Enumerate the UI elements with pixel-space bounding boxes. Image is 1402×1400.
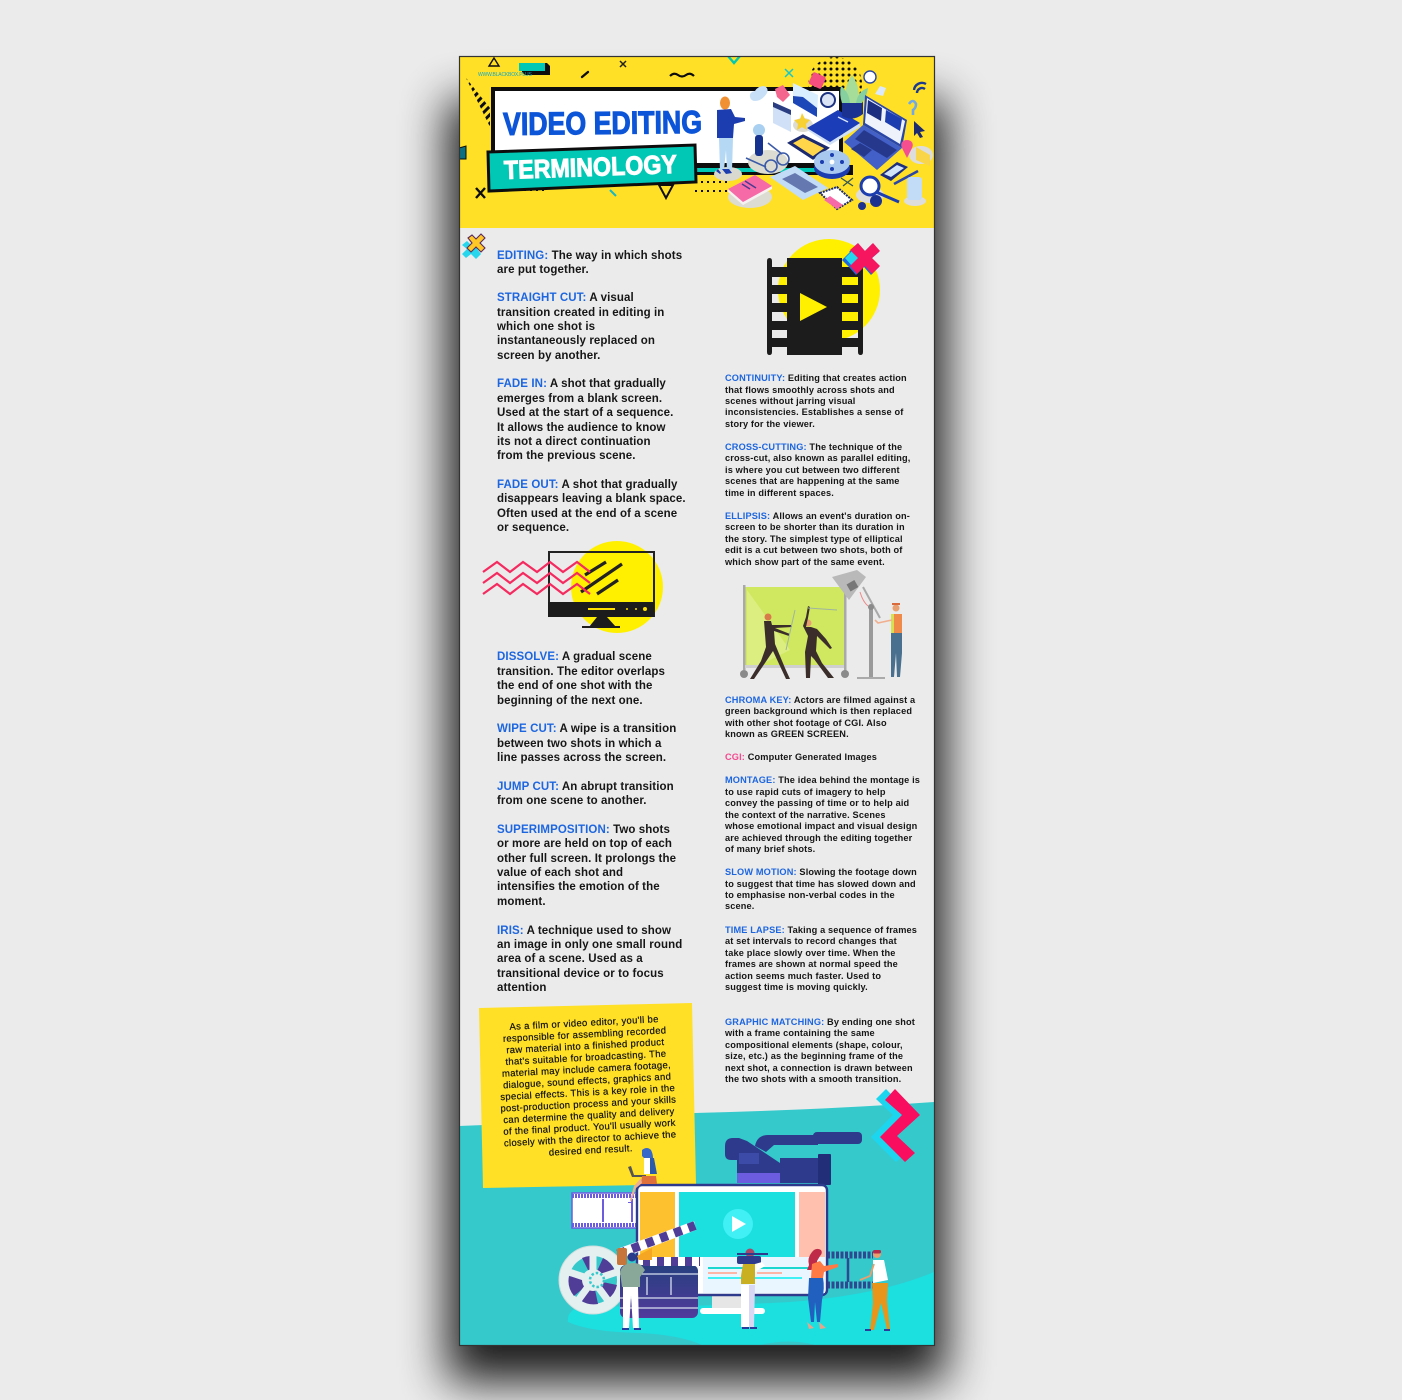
term: cross-cutting: scenes that are happening at the same	[725, 476, 900, 486]
text column: right top	[724, 373, 911, 567]
term: cross-cutting: cross-cut, also known as parallel editing,	[725, 453, 911, 463]
icon: newspaper	[770, 166, 828, 200]
term: chroma key: known as GREEN SCREEN.	[725, 729, 849, 739]
icon: chip	[820, 187, 852, 209]
icon: monitor with zigzag	[483, 541, 663, 633]
term: graphic matching: GRAPHIC MATCHING: By ending one shot	[725, 1017, 915, 1027]
term: chroma key: CHROMA KEY: Actors are filmed against a	[725, 695, 915, 705]
term: montage: MONTAGE: The idea behind the montage is	[725, 775, 920, 785]
term: iris: an image in only one small round	[497, 939, 682, 951]
title block shadow strip	[680, 165, 853, 175]
term: montage: whose emotional impact and visual design	[724, 821, 918, 831]
term: continuity: that flows smoothly across shots and	[725, 385, 895, 395]
term: iris: area of a scene. Used as a	[497, 953, 643, 965]
term: ellipsis: edit is a cut between two shots, both of	[725, 545, 903, 555]
term: ellipsis: ELLIPSIS: Allows an event's duration on-	[725, 511, 910, 521]
callout: yellow note: As a film or video editor, you'll be	[509, 1014, 659, 1033]
term: chroma key: green background which is then replaced	[725, 706, 912, 716]
term: editing: are put together.	[497, 264, 589, 276]
term: fade in: FADE IN: A shot that gradually	[497, 378, 666, 390]
figure: lighting technician	[875, 603, 902, 677]
term: fade out: or sequence.	[497, 522, 569, 534]
icon: microphone and glasses	[746, 124, 789, 174]
callout: yellow note: that's suitable for broadcasting. The	[505, 1049, 667, 1068]
term: wipe cut: line passes across the screen.	[497, 752, 666, 764]
card drop shadow	[447, 100, 946, 1382]
term: time lapse: at set intervals to record changes that	[725, 936, 897, 946]
term: graphic matching: with a frame containing the same	[724, 1028, 875, 1038]
figure: director with megaphone	[617, 1248, 652, 1330]
icon: blue book	[807, 110, 860, 145]
figure: woman sitting on monitor	[628, 1148, 657, 1203]
term: cgi: CGI: Computer Generated Images	[725, 752, 877, 762]
illustration: monitor	[637, 1185, 827, 1314]
term: editing: EDITING: The way in which shots	[497, 250, 682, 262]
figure: man	[714, 96, 745, 181]
term: superimposition: intensifies the emotion of the	[497, 881, 660, 893]
term: jump cut: JUMP CUT: An abrupt transition	[497, 781, 674, 793]
callout: yellow note: material may include camera footage,	[502, 1060, 671, 1080]
callout: yellow note	[479, 1003, 696, 1188]
term: fade in: from the previous scene.	[497, 450, 636, 462]
callout: yellow note: special effects. This is a key role in the	[500, 1083, 675, 1103]
term: chroma key: with other shot footage of CGI. Also	[724, 718, 887, 728]
term: cross-cutting: time in different spaces.	[725, 488, 834, 498]
icon: pink x	[842, 243, 880, 275]
film strip: back left	[572, 1193, 638, 1228]
term: straight cut: screen by another.	[497, 350, 600, 362]
term: montage: the context of the narrative. Scenes	[725, 810, 886, 820]
term: fade out: disappears leaving a blank space.	[497, 493, 686, 505]
text column: left	[496, 250, 686, 994]
callout: yellow note: raw material into a finished product	[506, 1037, 665, 1056]
term: cross-cutting: CROSS-CUTTING: The technique of the	[725, 442, 902, 452]
term: wipe cut: between two shots in which a	[497, 738, 662, 750]
term: graphic matching: compositional elements (shape, colour,	[725, 1040, 903, 1050]
figure: woman in orange	[807, 1249, 838, 1329]
term: slow motion: to suggest that time has slowed down and	[725, 879, 916, 889]
callout: yellow note: can determine the quality and delivery	[503, 1106, 675, 1126]
term: wipe cut: WIPE CUT: A wipe is a transition	[497, 723, 676, 735]
website url: WWW.BLACKBOX.PLUS	[478, 72, 532, 78]
infographic card	[459, 56, 934, 1345]
term: fade out: FADE OUT: A shot that gradually	[497, 479, 678, 491]
term: superimposition: moment.	[497, 896, 546, 908]
term: jump cut: from one scene to another.	[497, 795, 647, 807]
panel: teal footer background	[459, 1102, 934, 1345]
term: dissolve: DISSOLVE: A gradual scene	[497, 651, 652, 663]
term: iris: attention	[497, 982, 546, 994]
callout: yellow note: responsible for assembling recorded	[503, 1025, 667, 1045]
term: time lapse: action seems much faster. Used to	[725, 971, 881, 981]
icon: yellow x	[462, 234, 485, 259]
icon: film strip with play	[767, 239, 880, 355]
term: fade out: Often used at the end of a scene	[497, 508, 677, 520]
banner: terminology: TERMINOLOGY	[503, 149, 677, 185]
film strip: back right	[827, 1255, 873, 1285]
term: graphic matching: size, etc.) as the beginning frame of the	[725, 1051, 903, 1061]
figure: man in white	[860, 1250, 890, 1331]
term: dissolve: beginning of the next one.	[497, 695, 643, 707]
term: slow motion: SLOW MOTION: Slowing the footage down	[725, 867, 917, 877]
term: continuity: CONTINUITY: Editing that creates action	[725, 373, 907, 383]
term: cross-cutting: is where you cut between two different	[725, 465, 900, 475]
card border	[460, 56, 934, 1346]
term: graphic matching: the two shots with a smooth transition.	[725, 1074, 901, 1084]
term: dissolve: transition. The editor overlaps	[497, 666, 665, 678]
illustration: chroma key studio	[740, 570, 902, 679]
term: iris: IRIS: A technique used to show	[497, 925, 671, 937]
term: montage: are achieved through the editing together	[725, 833, 913, 843]
term: superimposition: SUPERIMPOSITION: Two shots	[497, 824, 670, 836]
callout: yellow note: post-production process and your skills	[500, 1094, 676, 1115]
text column: right bottom	[724, 695, 920, 1084]
term: ellipsis: screen to be shorter than its duration in	[725, 522, 905, 532]
figure: fighters	[750, 606, 837, 679]
icon: plant	[840, 75, 868, 119]
term: fade in: its not a direct continuation	[497, 436, 651, 448]
panel: yellow header	[459, 56, 934, 228]
term: superimposition: or more are held on top of each	[497, 838, 672, 850]
term: continuity: story for the viewer.	[725, 419, 815, 429]
term: montage: of many brief shots.	[725, 844, 815, 854]
term: fade in: emerges from a blank screen.	[497, 393, 662, 405]
icon: play button	[723, 1209, 753, 1239]
term: dissolve: the end of one shot with the	[497, 680, 652, 692]
term: time lapse: suggest time is moving quickly.	[725, 982, 868, 992]
callout: yellow note: of the final product. You'll usually work	[503, 1118, 676, 1138]
small floating icons	[808, 71, 933, 210]
figure: camera operator	[737, 1248, 768, 1329]
illustration: clapperboard	[617, 1221, 700, 1318]
term: straight cut: which one shot is	[496, 321, 595, 333]
heading: video editing: VIDEO EDITING	[503, 104, 702, 142]
callout: yellow note: closely with the director to achieve the	[504, 1129, 677, 1149]
isometric illustration	[714, 71, 933, 210]
term: time lapse: TIME LAPSE: Taking a sequence of frames	[725, 925, 917, 935]
icon: pink book	[728, 175, 772, 208]
term: superimposition: value of each shot and	[497, 867, 623, 879]
term: ellipsis: which show part of the same event.	[724, 557, 885, 567]
term: time lapse: take place slowly over time. When the	[725, 948, 895, 958]
illustration: video camera	[725, 1132, 862, 1185]
icon: studio lamp	[832, 570, 885, 679]
term: slow motion: to emphasise non-verbal codes in the	[725, 890, 895, 900]
icon: cloud, tag and picture card	[750, 83, 835, 132]
term: continuity: inconsistencies. Establishes a sense of	[725, 407, 904, 417]
term: ellipsis: the story. The simplest type of elliptical	[725, 534, 903, 544]
icon: pink chevron	[871, 1089, 920, 1162]
term: slow motion: scene.	[725, 901, 755, 911]
term: time lapse: frames are shown at normal speed the	[725, 959, 898, 969]
term: straight cut: instantaneously replaced on	[497, 335, 655, 347]
term: iris: transitional device or to focus	[497, 968, 664, 980]
term: fade in: Used at the start of a sequence.	[497, 407, 673, 419]
icon: film frame	[790, 136, 827, 158]
term: straight cut: STRAIGHT CUT: A visual	[497, 292, 634, 304]
icon: reel	[814, 150, 850, 179]
callout: yellow note: desired end result.	[549, 1143, 633, 1159]
icon: laptop	[844, 95, 907, 170]
term: superimposition: other full screen. It prolongs the	[497, 853, 676, 865]
term: continuity: scenes without jarring visual	[725, 396, 855, 406]
term: fade in: It allows the audience to know	[497, 422, 666, 434]
term: graphic matching: next shot, a connection is drawn between	[725, 1063, 913, 1073]
decorative header shapes	[459, 56, 862, 198]
term: straight cut: transition created in editing in	[497, 307, 664, 319]
term: montage: convey the passing of time or to help aid	[725, 798, 909, 808]
callout: yellow note: dialogue, sound effects, graphics and	[503, 1072, 671, 1091]
illustration: film reel	[559, 1246, 627, 1314]
title box	[493, 89, 841, 165]
term: montage: to use rapid cuts of imagery to help	[725, 787, 886, 797]
